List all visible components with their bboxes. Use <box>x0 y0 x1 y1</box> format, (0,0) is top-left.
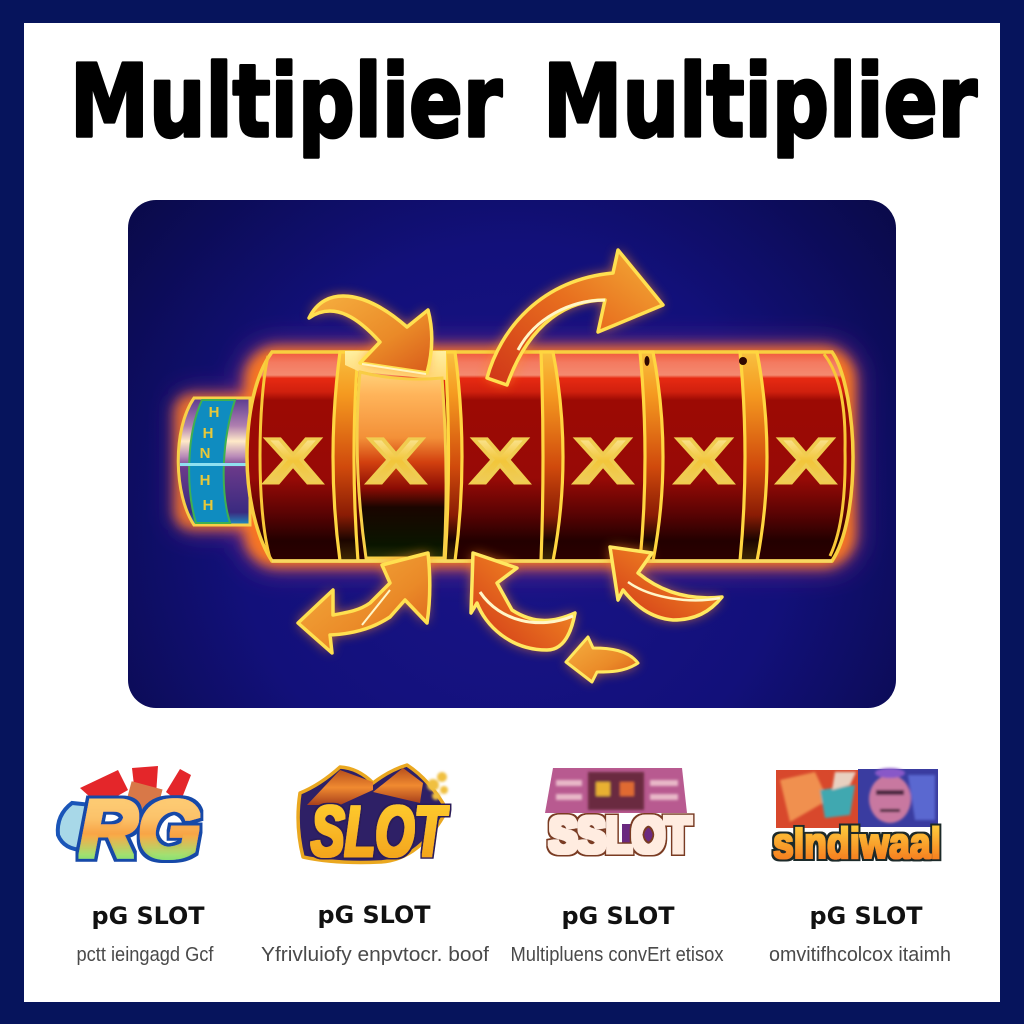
icon: left hub of the reel <box>178 398 250 525</box>
arrow: lower right <box>610 547 722 620</box>
logo: SSLOT <box>545 768 691 863</box>
caption: column 1: pctt ieingagd Gcf <box>76 944 214 966</box>
icon: left hub of the reel: H <box>203 425 213 442</box>
icon: left hub of the reel: N <box>200 445 210 462</box>
reel barrel <box>247 352 853 561</box>
icon: left hub of the reel: H <box>200 472 210 489</box>
logo: SSLOT: SSLOT <box>549 807 691 863</box>
arrow: lower centre <box>471 553 575 650</box>
caption: column 3 <box>510 902 724 966</box>
reel rings <box>333 352 767 561</box>
highlighted reel <box>345 351 446 558</box>
arrow: lower left <box>298 553 430 653</box>
caption: column 4 <box>769 902 951 966</box>
multiplier symbols: X <box>574 425 632 497</box>
caption: column 2: pG SLOT <box>318 901 431 929</box>
title <box>70 43 978 160</box>
caption: column 4: omvitifhcolcox itaimh <box>769 944 951 966</box>
logo: SLOT: SLOT <box>311 793 449 872</box>
caption: column 3: pG SLOT <box>562 902 675 930</box>
caption: column 2 <box>261 901 489 966</box>
multiplier symbols: X <box>777 425 835 497</box>
arrow: small bottom <box>566 637 638 682</box>
logo: Thai-style title <box>773 768 941 868</box>
icon: left hub of the reel: H <box>209 404 219 421</box>
multiplier symbols: X <box>367 425 425 497</box>
reel wide glow <box>175 342 860 572</box>
caption: column 4: pG SLOT <box>810 902 923 930</box>
logo: RG: RG <box>79 784 201 875</box>
logo: Thai-style title: sIndiwaal <box>773 819 941 868</box>
multiplier symbols <box>264 425 835 497</box>
caption: column 2: Yfrivluiofy enpvtocr. boof <box>261 944 489 966</box>
ring slits <box>644 356 747 366</box>
multiplier symbols: X <box>471 425 529 497</box>
title: Multiplier <box>70 43 503 160</box>
panel: slot reel illustration <box>128 200 896 708</box>
arrow glows <box>298 250 722 682</box>
arrow: top left curving down <box>309 296 432 374</box>
caption: column 1: pG SLOT <box>92 902 205 930</box>
reel end caps <box>260 354 845 558</box>
reel bottom rail <box>272 559 832 563</box>
multiplier symbols: X <box>675 425 733 497</box>
icon: left hub of the reel: H <box>203 497 213 514</box>
arrow: top right curving up <box>487 250 663 385</box>
caption: column 1 <box>76 902 214 966</box>
multiplier symbols: X <box>264 425 322 497</box>
reel glow <box>174 346 856 568</box>
caption: column 3: Multipluens convErt etisox <box>510 944 724 966</box>
logo: SLOT <box>298 765 449 872</box>
